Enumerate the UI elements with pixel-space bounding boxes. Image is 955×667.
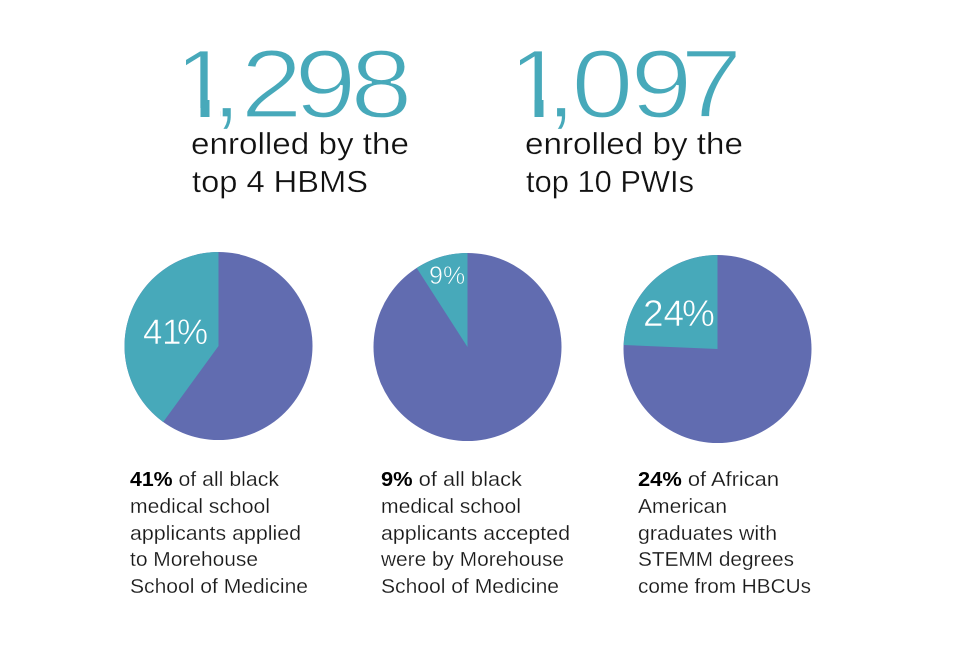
pie chart: 24% [624,255,812,443]
stat label top 10 PWIs: top 10 PWIs [526,164,694,199]
caption: 24% STEMM graduates: graduates with [638,523,777,545]
caption: 41% applied: medical school [130,496,270,518]
stat: 1,298 enrolled by top 4 HBMS [170,30,413,199]
caption: 41% applied: to Morehouse [130,549,258,571]
pie chart: 41% [124,252,312,440]
caption: 9% accepted: School of Medicine [381,576,559,598]
caption: 24% STEMM graduates: American [638,496,727,518]
pie chart: 41%: 41% [143,313,208,352]
caption: 24% STEMM graduates: come from HBCUs [638,576,811,598]
caption: 9% accepted: applicants accepted [381,523,570,545]
caption: 41% applied [130,469,308,598]
caption: 9% accepted: 9% of all black [381,469,523,491]
caption: 24% STEMM graduates [638,469,811,598]
caption: 41% applied: 41% of all black [130,469,280,491]
caption: 9% accepted: medical school [381,496,521,518]
pie chart: 24%: 24% [643,293,715,334]
stat label top 4 HBMS: enrolled by the [191,126,409,161]
stat label top 4 HBMS [191,126,409,199]
caption: 24% STEMM graduates: STEMM degrees [638,549,794,571]
caption: 41% applied: applicants applied [130,523,301,545]
stat label top 4 HBMS: top 4 HBMS [192,164,368,199]
caption: 24% STEMM graduates: 24% of African [638,469,779,491]
pie chart: 9%: 9% [429,262,465,290]
stat label top 10 PWIs [525,126,743,199]
stat label top 10 PWIs: enrolled by the [525,126,743,161]
stat: 1,097 enrolled by top 10 PWIs [504,30,743,199]
caption: 9% accepted: were by Morehouse [380,549,564,571]
big number 1,298: 1,298 [171,30,413,139]
big number 1,097: 1,097 [505,30,742,139]
caption: 9% accepted [380,469,570,598]
pie chart: 9% [374,253,562,441]
caption: 41% applied: School of Medicine [130,576,308,598]
